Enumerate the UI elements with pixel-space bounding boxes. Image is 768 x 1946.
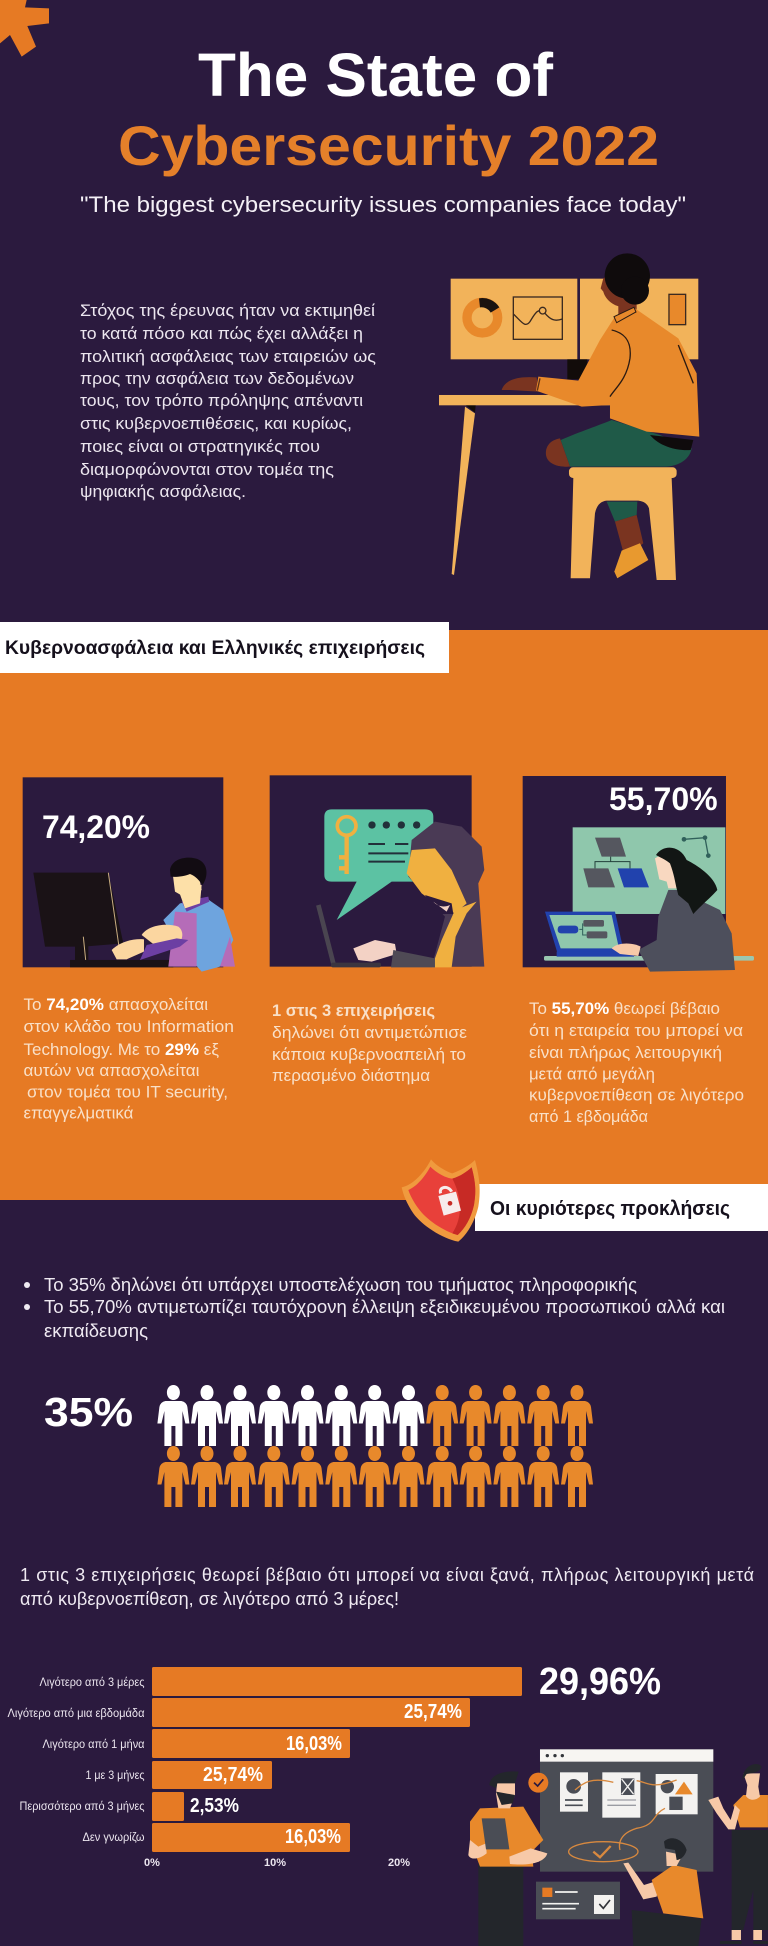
category labels xyxy=(8,1677,145,1844)
text block: card 1 description: Το 74,20% απασχολείται xyxy=(24,995,208,1014)
text block: card 1 description xyxy=(24,995,234,1123)
icon: hacker with password bubble xyxy=(318,809,484,967)
text block: card 1 description: στον τομέα του IT security, xyxy=(27,1082,228,1102)
bar values: 25,74% xyxy=(404,1701,462,1723)
orange people xyxy=(157,1385,593,1507)
stat: 74,20%: 74,20% xyxy=(42,809,150,845)
text block: card 3 description: μετά από μεγάλη xyxy=(529,1064,655,1084)
panel: card 3 xyxy=(523,776,754,972)
bar values: 29,96% xyxy=(539,1661,661,1703)
text block: intro: Στόχος της έρευνας ήταν να εκτιμηθεί xyxy=(80,301,375,320)
category labels: Δεν γνωρίζω xyxy=(82,1832,145,1844)
panel: card 2 xyxy=(270,775,484,967)
text block: card 3 description xyxy=(529,999,744,1126)
text block: card 3 description: είναι πλήρως λειτουργική xyxy=(529,1043,722,1062)
panel: orange section xyxy=(0,630,768,1200)
text block: recovery statement: 1 στις 3 επιχειρήσεις θεωρεί βέβαιο ότι μπορεί να είναι ξανά, πλήρως λειτουργική μετά xyxy=(20,1565,754,1585)
text block: intro xyxy=(80,301,376,501)
text block: recovery statement: από κυβερνοεπίθεση, σε λιγότερο από 3 μέρες! xyxy=(20,1589,399,1609)
text block: challenges bullets: εκπαίδευσης xyxy=(44,1321,148,1341)
axis labels xyxy=(144,1857,410,1869)
title: The State of xyxy=(198,41,554,109)
text block: card 2 description: κάποια κυβερνοαπειλή το xyxy=(272,1045,466,1064)
panel: challenges heading xyxy=(475,1184,768,1231)
axis labels: 0% xyxy=(144,1857,160,1869)
category labels: Λιγότερο από μια εβδομάδα xyxy=(8,1708,145,1720)
axis labels: 20% xyxy=(388,1857,410,1869)
panel: challenges heading: Οι κυριότερες προκλήσεις xyxy=(490,1198,730,1220)
text block: recovery statement xyxy=(20,1565,754,1609)
icon: woman with laptop and board xyxy=(544,827,754,972)
category labels: Περισσότερο από 3 μήνες xyxy=(20,1801,145,1813)
text block: intro: στις κυβερνοεπιθέσεις, και κυρίως, xyxy=(80,414,352,433)
text block: card 3 description: από 1 εβδομάδα xyxy=(529,1107,648,1126)
axis labels: 10% xyxy=(264,1857,286,1869)
bars xyxy=(152,1667,522,1852)
heading: Greek businesses: Κυβερνοασφάλεια και Ελληνικές επιχειρήσεις xyxy=(5,638,425,659)
icon: man at computer xyxy=(33,858,235,972)
stat: 35%: 35% xyxy=(44,1389,133,1435)
category labels: Λιγότερο από 1 μήνα xyxy=(42,1739,145,1751)
text block: card 3 description: κυβερνοεπίθεση σε λιγότερο xyxy=(529,1086,744,1105)
text block: intro: πολιτική ασφάλειας των εταιρειών ως xyxy=(80,347,376,366)
text block: card 2 description xyxy=(272,1001,467,1085)
text block: card 1 description: αυτών να απασχολείται xyxy=(24,1061,200,1080)
text block: intro: προς την ασφάλεια των δεδομένων xyxy=(80,369,354,388)
text block: intro: διαμορφώνονται στον τομέα της xyxy=(80,460,334,479)
text block: intro: ψηφιακής ασφάλειας. xyxy=(80,482,246,501)
text block: card 3 description: ότι η εταιρεία του μπορεί να xyxy=(529,1021,743,1040)
title xyxy=(118,41,659,177)
text block: card 3 description: Το 55,70% θεωρεί βέβαιο xyxy=(529,999,720,1018)
text block: card 2 description: δηλώνει ότι αντιμετώπισε xyxy=(272,1023,467,1042)
illustration: person at desk with monitors xyxy=(439,253,699,580)
bar values: 16,03% xyxy=(285,1826,341,1848)
bar values xyxy=(190,1661,661,1848)
chart: people pictogram xyxy=(157,1385,593,1507)
title: Cybersecurity 2022 xyxy=(118,114,659,177)
icon: red security shield xyxy=(402,1159,480,1242)
text block: challenges bullets: Το 35% δηλώνει ότι υπάρχει υποστελέχωση του τμήματος πληροφορικής xyxy=(44,1275,637,1295)
text block: card 2 description: 1 στις 3 επιχειρήσεις xyxy=(272,1001,435,1020)
text block: card 1 description: επαγγελματικά xyxy=(24,1104,134,1123)
bar values: 2,53% xyxy=(190,1795,239,1817)
text block: intro: το κατά πόσο και πώς έχει αλλάξει η xyxy=(80,324,363,343)
text block: challenges bullets xyxy=(24,1275,725,1341)
category labels: 1 με 3 μήνες xyxy=(86,1770,145,1782)
bar chart: recovery time xyxy=(8,1661,661,1869)
text block: card 1 description: στον κλάδο του Information xyxy=(24,1017,234,1036)
bar values: 25,74% xyxy=(203,1764,263,1786)
white people xyxy=(157,1385,424,1446)
text block: card 1 description: Technology. Με το 29% εξ xyxy=(24,1040,219,1059)
panel: card 1 xyxy=(23,777,235,972)
icon: orange asterisk corner xyxy=(0,0,49,57)
text block: intro: ποιες είναι οι στρατηγικές που xyxy=(80,437,320,456)
heading: Greek businesses xyxy=(0,622,449,673)
subtitle: "The biggest cybersecurity issues companies face today" xyxy=(80,192,686,217)
text block: intro: τους, τον τρόπο πρόληψης απέναντι xyxy=(80,391,363,410)
text block: challenges bullets: Το 55,70% αντιμετωπίζει ταυτόχρονη έλλειψη εξειδικευμένου προσωπικού αλλά και xyxy=(44,1297,725,1317)
bar values: 16,03% xyxy=(286,1733,342,1755)
stat: 55,70%: 55,70% xyxy=(609,781,718,817)
category labels: Λιγότερο από 3 μέρες xyxy=(40,1677,145,1689)
text block: card 2 description: περασμένο διάστημα xyxy=(272,1066,430,1085)
illustration: team with workflow screen xyxy=(468,1749,768,1946)
